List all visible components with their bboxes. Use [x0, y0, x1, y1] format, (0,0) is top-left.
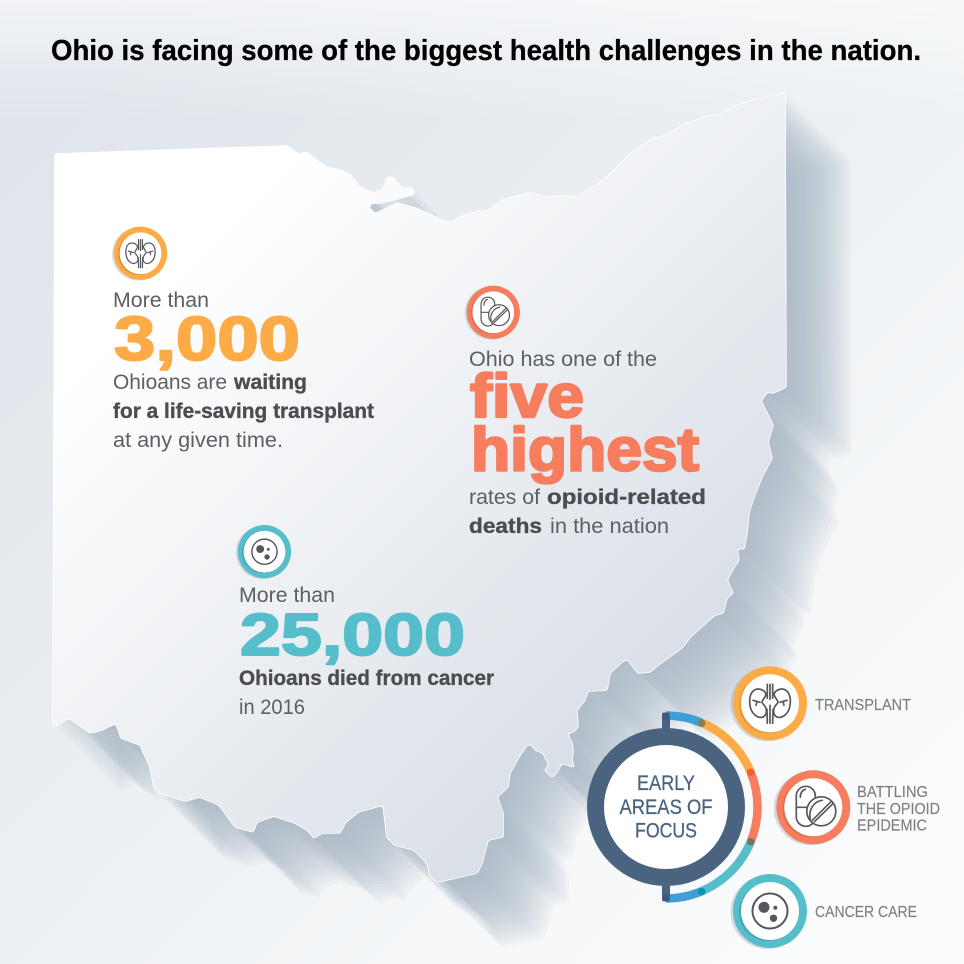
icon: transplant [730, 666, 807, 741]
panel: early areas of focus [596, 666, 940, 949]
heading: five highest [470, 362, 699, 484]
text: opioid-related deaths: deaths [469, 515, 542, 538]
icon: kidneys [112, 227, 167, 281]
heading: five highest: highest [471, 416, 699, 484]
central ring [596, 736, 736, 878]
map long shadow [56, 96, 852, 948]
number: 3,000: 3,000 [114, 305, 300, 374]
central label: AREAS OF [620, 796, 712, 819]
text: more than: More than [239, 584, 335, 607]
label: battling the opioid epidemic: THE OPIOID [857, 801, 940, 818]
text: opioid-related deaths: in the nation [550, 515, 669, 538]
label: battling the opioid epidemic [857, 784, 940, 834]
heading: five highest: five [470, 362, 584, 430]
panel: transplant statistic [112, 227, 374, 452]
text: waiting for transplant: Ohioans are [113, 371, 227, 394]
text: waiting for transplant: waiting [233, 371, 307, 394]
text: more than: More than [113, 289, 209, 312]
number: 25,000: 25,000 [240, 602, 465, 668]
arc joints [662, 713, 754, 902]
text: ohio has one of the: Ohio has one of the [469, 348, 657, 371]
central label: FOCUS [635, 820, 697, 842]
text: opioid-related deaths: rates of [469, 486, 540, 509]
icon: cell [236, 525, 291, 579]
icon: cancer [730, 874, 807, 949]
central label [620, 772, 712, 842]
text: died from cancer: in 2016 [239, 696, 305, 719]
segmented arc [666, 716, 758, 898]
ring ticks [662, 712, 670, 902]
text: waiting for transplant: for a life-saving transplant [113, 400, 374, 423]
text: waiting for transplant [113, 371, 374, 452]
label: battling the opioid epidemic: EPIDEMIC [857, 818, 927, 834]
text: died from cancer [239, 667, 494, 719]
icon: pills [465, 286, 520, 340]
text: opioid-related deaths: opioid-related [547, 486, 706, 509]
icon: opioid [774, 770, 850, 845]
title: Ohio is facing some of the biggest health challenges in the nation. [51, 35, 921, 67]
panel: cancer statistic [236, 525, 494, 719]
text: opioid-related deaths [469, 486, 706, 538]
label: battling the opioid epidemic: BATTLING [857, 784, 928, 801]
text: died from cancer: Ohioans died from cancer [239, 667, 494, 690]
label: cancer care: CANCER CARE [815, 904, 917, 921]
central label: EARLY [637, 772, 695, 795]
panel: opioid statistic [465, 286, 706, 538]
map of Ohio [50, 90, 790, 885]
label: transplant: TRANSPLANT [815, 697, 911, 714]
text: waiting for transplant: at any given time. [113, 429, 283, 452]
